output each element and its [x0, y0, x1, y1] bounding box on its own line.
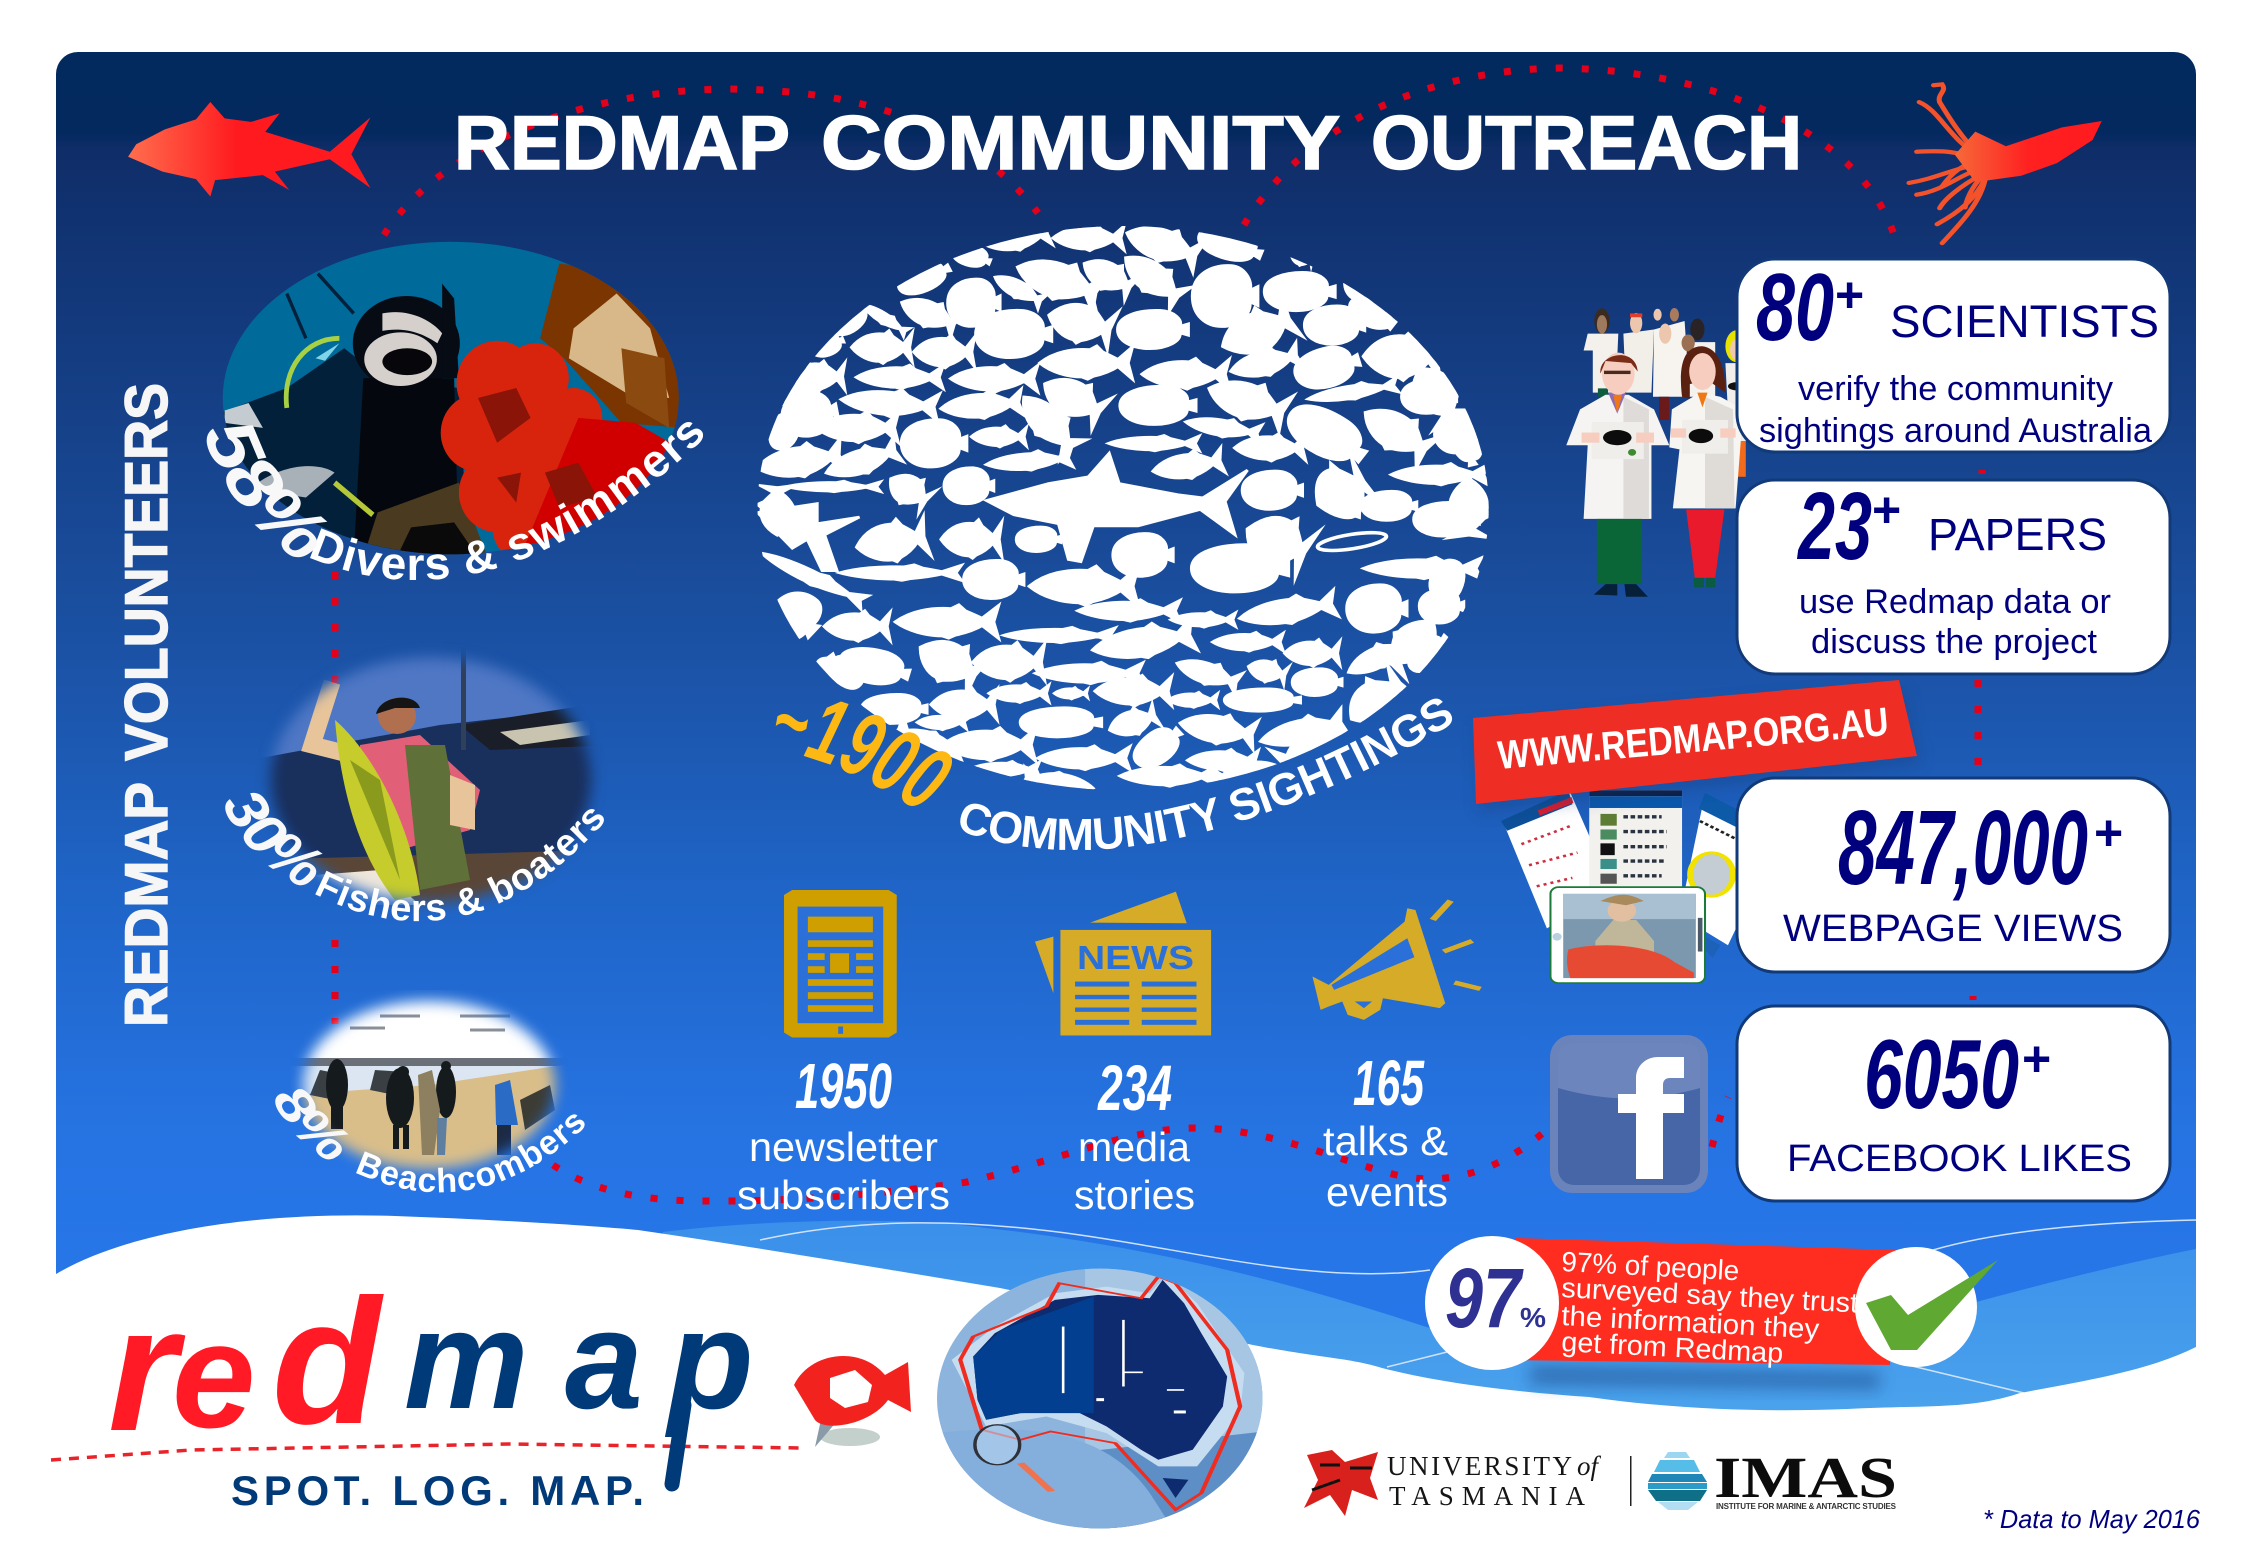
stat: media stories	[1074, 1052, 1195, 1218]
wave highlight lines	[760, 1220, 2196, 1393]
label: fishers and boaters	[225, 792, 604, 922]
stat: talks and events: 165	[1353, 1047, 1425, 1119]
callout: 97 percent trust banner	[1425, 1236, 1998, 1390]
title: OUTREACH	[1371, 101, 1802, 186]
callout: 97 percent trust banner: surveyed say they trust	[1561, 1272, 1859, 1319]
callout: 97 percent trust banner: 97	[1445, 1251, 1524, 1345]
light blue swoosh	[663, 1221, 2196, 1420]
logo: IMAS: IMAS	[1714, 1445, 1897, 1510]
photo: beachcombers	[290, 990, 570, 1180]
fish school: community sightings ball	[755, 217, 1491, 799]
icon: fish location pin	[794, 1356, 911, 1447]
panel: 23+ papers: 23	[1797, 473, 1872, 580]
illustration: website on phones and tablet	[1501, 790, 1782, 983]
title	[454, 101, 1802, 186]
panel: 80+ scientists: +	[1835, 267, 1864, 323]
logo: University of Tasmania: of	[1577, 1451, 1602, 1481]
panel: 80+ scientists: verify the community	[1798, 370, 2113, 408]
callout: 97 percent trust banner: the information they	[1561, 1300, 1820, 1344]
logo: University of Tasmania: TASMANIA	[1389, 1481, 1586, 1511]
icon: newspaper	[1035, 892, 1211, 1035]
stat: newsletter subscribers: newsletter	[749, 1124, 938, 1170]
dotted route: top arcs	[384, 68, 1894, 235]
footnote: * Data to May 2016	[1983, 1504, 2201, 1534]
panel: facebook likes: 6050	[1864, 1019, 2019, 1129]
logo: redmap wordmark: p	[664, 1281, 754, 1438]
panel: webpage views	[1737, 778, 2170, 972]
illustration: scientists	[1566, 308, 1751, 597]
logo: redmap wordmark: SPOT. LOG. MAP.	[231, 1467, 644, 1514]
panel: 23+ papers: use Redmap data or	[1799, 583, 2111, 621]
panel: webpage views: +	[2094, 805, 2123, 861]
label: fishers and boaters: Fishers & boaters	[315, 809, 604, 922]
logo: IMAS	[1648, 1445, 1897, 1511]
icon: newsletter tablet	[784, 890, 897, 1037]
icon: newspaper: NEWS	[1077, 939, 1194, 976]
dotted route: right side verticals	[1973, 470, 1982, 1000]
stat: media stories: stories	[1074, 1172, 1195, 1218]
label: fishers and boaters: 30%	[225, 792, 322, 886]
panel: 80+ scientists	[1737, 254, 2170, 452]
logo: University of Tasmania: UNIVERSITY	[1387, 1451, 1572, 1481]
panel: facebook likes: +	[2022, 1031, 2051, 1087]
panel: 80+ scientists: 80	[1756, 254, 1834, 361]
label: beachcombers: Beachcombers	[356, 1114, 585, 1192]
panel: 80+ scientists: sightings around Australia	[1759, 412, 2152, 450]
stat: newsletter subscribers: 1950	[795, 1050, 892, 1122]
logo: redmap wordmark	[51, 1262, 803, 1514]
photo: diver	[220, 239, 684, 562]
map: Australia globe with red range outline	[934, 1267, 1279, 1533]
logo: redmap wordmark: r	[108, 1269, 186, 1468]
label: beachcombers	[275, 1089, 585, 1192]
heading: Redmap volunteers: REDMAP	[113, 782, 180, 1027]
callout: website banner	[1473, 680, 1921, 812]
title: REDMAP	[454, 101, 790, 186]
icon: facebook logo	[1550, 1035, 1708, 1193]
label: beachcombers: 8%	[275, 1089, 348, 1160]
panel: 23+ papers	[1737, 473, 2170, 674]
logo: redmap wordmark: d	[272, 1262, 384, 1461]
icon: tuna	[128, 102, 370, 197]
stat: talks and events: talks &	[1323, 1118, 1448, 1164]
panel: facebook likes: FACEBOOK LIKES	[1787, 1138, 2132, 1180]
logo: redmap wordmark: m	[404, 1281, 528, 1438]
panel: facebook likes	[1737, 1006, 2170, 1201]
icon: megaphone	[1312, 901, 1480, 1020]
panel: 23+ papers: +	[1872, 482, 1901, 538]
panel: 80+ scientists: SCIENTISTS	[1890, 296, 2159, 347]
logo: IMAS: INSTITUTE FOR MARINE & ANTARCTIC STUDIES	[1716, 1502, 1897, 1511]
heading: Redmap volunteers	[113, 383, 180, 1027]
logo: University of Tasmania	[1304, 1450, 1602, 1516]
panel: webpage views: 847,000	[1838, 789, 2088, 907]
callout: 97 percent trust banner: %	[1520, 1302, 1546, 1333]
logo: redmap wordmark: e	[172, 1291, 255, 1459]
label: divers and swimmers: Divers & swimmers	[310, 422, 704, 580]
icon: squid	[1909, 84, 2102, 243]
stat: talks and events: events	[1326, 1169, 1448, 1215]
logo: redmap wordmark: a	[565, 1281, 643, 1438]
stat: media stories: 234	[1097, 1052, 1172, 1124]
dotted route: left verticals	[332, 572, 338, 1024]
rim fish filling the ball edge	[758, 256, 1490, 799]
stat: newsletter subscribers: subscribers	[737, 1172, 950, 1218]
callout: 97 percent trust banner: get from Redmap	[1561, 1326, 1784, 1369]
callout: 97 percent trust banner: 97% of people	[1561, 1246, 1740, 1286]
stat: media stories: media	[1078, 1124, 1190, 1170]
count: ~1900: ~1900	[776, 702, 952, 806]
stat: newsletter subscribers	[737, 1050, 950, 1218]
dotted route: wave through stats	[553, 1097, 1728, 1201]
panel: 23+ papers: discuss the project	[1811, 623, 2098, 661]
white wave footer	[0, 1215, 2196, 1558]
label: community sightings: COMMUNITY SIGHTINGS	[960, 698, 1452, 850]
label: divers and swimmers	[206, 422, 704, 580]
panel: 23+ papers: PAPERS	[1928, 509, 2107, 560]
panel: webpage views: WEBPAGE VIEWS	[1783, 908, 2123, 950]
label: divers and swimmers: 58%	[206, 425, 328, 558]
title: COMMUNITY	[821, 101, 1340, 186]
callout: website banner: WWW.REDMAP.ORG.AU	[1496, 700, 1890, 778]
stat: talks and events	[1323, 1047, 1448, 1215]
photo: fisher	[262, 652, 600, 912]
heading: Redmap volunteers: VOLUNTEERS	[113, 383, 180, 761]
divider	[1630, 1456, 1632, 1506]
